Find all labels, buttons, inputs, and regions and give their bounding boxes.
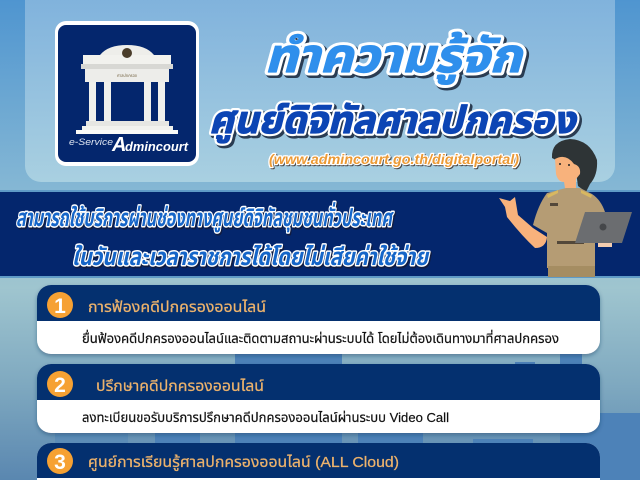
panel: title header xyxy=(25,0,615,182)
icon: number 3 xyxy=(47,448,73,474)
card 2 heading: ปรึกษาคดีปกครองออนไลน์ xyxy=(96,378,264,395)
laptop xyxy=(575,212,632,243)
website url: (www.admincourt.go.th/digitalportal) xyxy=(270,152,520,168)
title line 2: ศูนย์ดิจิทัลศาลปกครอง xyxy=(209,100,577,144)
website url: (www.admincourt.go.th/digitalportal) xyxy=(269,151,519,167)
uniform xyxy=(533,188,605,268)
card 1 heading: การฟ้องคดีปกครองออนไลน์ xyxy=(88,299,266,316)
icon: number 1 xyxy=(47,292,73,318)
icon: court building: ศาลปกครอง xyxy=(117,73,137,78)
card 1 body: ยื่นฟ้องคดีปกครองออนไลน์และติดตามสถานะผ่านระบบได้ โดยไม่ต้องเดินทางมาที่ศาลปกครอง xyxy=(82,329,559,346)
card 3 xyxy=(37,443,600,480)
icon: Admincourt e-Service logo: dmincourt xyxy=(125,140,189,154)
title line 1: ทำความรู้จัก xyxy=(266,31,525,87)
icon: court building xyxy=(76,45,178,134)
icon: number 2 xyxy=(47,371,73,397)
hair xyxy=(552,139,597,192)
illustration: officer with laptop xyxy=(499,139,632,277)
title line 1: ทำความรู้จัก xyxy=(264,29,523,85)
icon: number 1: 1 xyxy=(54,295,66,318)
card 1 xyxy=(37,285,600,354)
card 2 body: ลงทะเบียนขอรับบริการปรึกษาคดีปกครองออนไลน์ผ่านระบบ Video Call xyxy=(82,410,449,425)
panel: service banner xyxy=(0,190,640,278)
icon: number 2: 2 xyxy=(54,374,66,397)
card 3 heading: ศูนย์การเรียนรู้ศาลปกครองออนไลน์ (ALL Cloud) xyxy=(88,454,399,471)
hand on laptop xyxy=(598,240,612,247)
website url: (www.admincourt.go.th/digitalportal) xyxy=(269,151,519,167)
icon: number 3: 3 xyxy=(54,451,66,474)
banner line 1: สามารถใช้บริการผ่านช่องทางศูนย์ดิจิทัลชุมชนทั่วประเทศ xyxy=(16,202,394,233)
title line 1: ทำความรู้จัก xyxy=(264,29,523,85)
title line 2: ศูนย์ดิจิทัลศาลปกครอง xyxy=(209,100,577,144)
icon: Admincourt e-Service logo xyxy=(55,21,199,166)
banner line 2: ในวันและเวลาราชการได้โดยไม่เสียค่าใช้จ่าย xyxy=(72,244,430,271)
banner line 2: ในวันและเวลาราชการได้โดยไม่เสียค่าใช้จ่าย xyxy=(73,246,431,272)
shoulder boards xyxy=(547,190,592,198)
title line 2: ศูนย์ดิจิทัลศาลปกครอง xyxy=(211,102,579,146)
icon: Admincourt e-Service logo: A xyxy=(111,134,126,156)
face xyxy=(555,157,580,194)
banner line 1: สามารถใช้บริการผ่านช่องทางศูนย์ดิจิทัลชุมชนทั่วประเทศ xyxy=(17,203,395,234)
banner line 2: ในวันและเวลาราชการได้โดยไม่เสียค่าใช้จ่าย xyxy=(72,244,430,271)
background city skyline xyxy=(55,354,640,480)
banner line 1: สามารถใช้บริการผ่านช่องทางศูนย์ดิจิทัลชุมชนทั่วประเทศ xyxy=(16,202,394,233)
logo wordmark: e-Service xyxy=(69,137,113,148)
arm xyxy=(499,197,547,248)
card 2 xyxy=(37,364,600,433)
banner line 1 xyxy=(16,202,395,234)
